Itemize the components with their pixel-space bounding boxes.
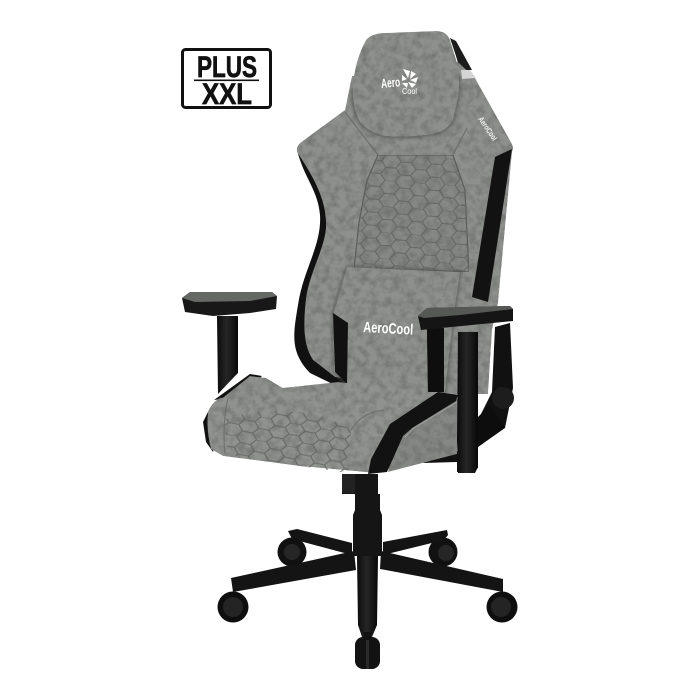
lumbar pillow <box>333 267 460 392</box>
caster: rear left <box>278 538 306 566</box>
lumbar logo: AeroCool <box>363 319 414 339</box>
headrest: Cool <box>402 87 417 96</box>
caster: front centre <box>355 632 380 669</box>
icon: AeroCool fan <box>402 69 418 88</box>
seat hexagon quilting <box>225 411 351 473</box>
right arm pad <box>418 306 513 330</box>
mechanism and rear frame <box>423 323 514 472</box>
seat seams <box>224 398 384 454</box>
headrest logo: Aero <box>380 74 401 91</box>
seat cushion <box>207 382 458 473</box>
seam lines <box>345 112 467 155</box>
black strap behind headrest <box>450 38 472 70</box>
base legs <box>231 529 503 637</box>
white strap <box>461 70 476 79</box>
backrest side black panel <box>294 150 360 390</box>
black panel: right <box>472 149 512 302</box>
chair base <box>218 474 518 669</box>
lumbar black strap: left <box>333 313 348 384</box>
left armrest <box>182 292 277 394</box>
badge: PLUS XXL: XXL <box>202 78 252 111</box>
left arm post <box>217 316 238 394</box>
seat <box>203 374 459 474</box>
right armrest <box>418 306 513 473</box>
headrest <box>353 31 459 137</box>
lumbar black strap: right <box>427 332 444 391</box>
backrest upholstery <box>297 62 513 394</box>
seat black wedge <box>368 392 458 474</box>
panel: hexagon quilting <box>354 155 469 272</box>
caster: front right <box>486 592 518 622</box>
caster: rear right <box>428 538 458 566</box>
right arm post <box>457 332 478 473</box>
right arm bracket <box>427 328 444 392</box>
seat rear bolster <box>220 376 283 400</box>
gas cylinder <box>342 474 382 556</box>
badge: PLUS XXL: PLUS <box>197 51 257 84</box>
side label: AeroCool <box>476 115 499 143</box>
seat left rim <box>203 410 218 452</box>
seat rear rim <box>214 374 262 400</box>
seat side panel <box>388 398 459 472</box>
left arm pad <box>182 292 277 316</box>
badge: PLUS XXL <box>182 50 270 111</box>
caster: front left <box>218 592 248 622</box>
